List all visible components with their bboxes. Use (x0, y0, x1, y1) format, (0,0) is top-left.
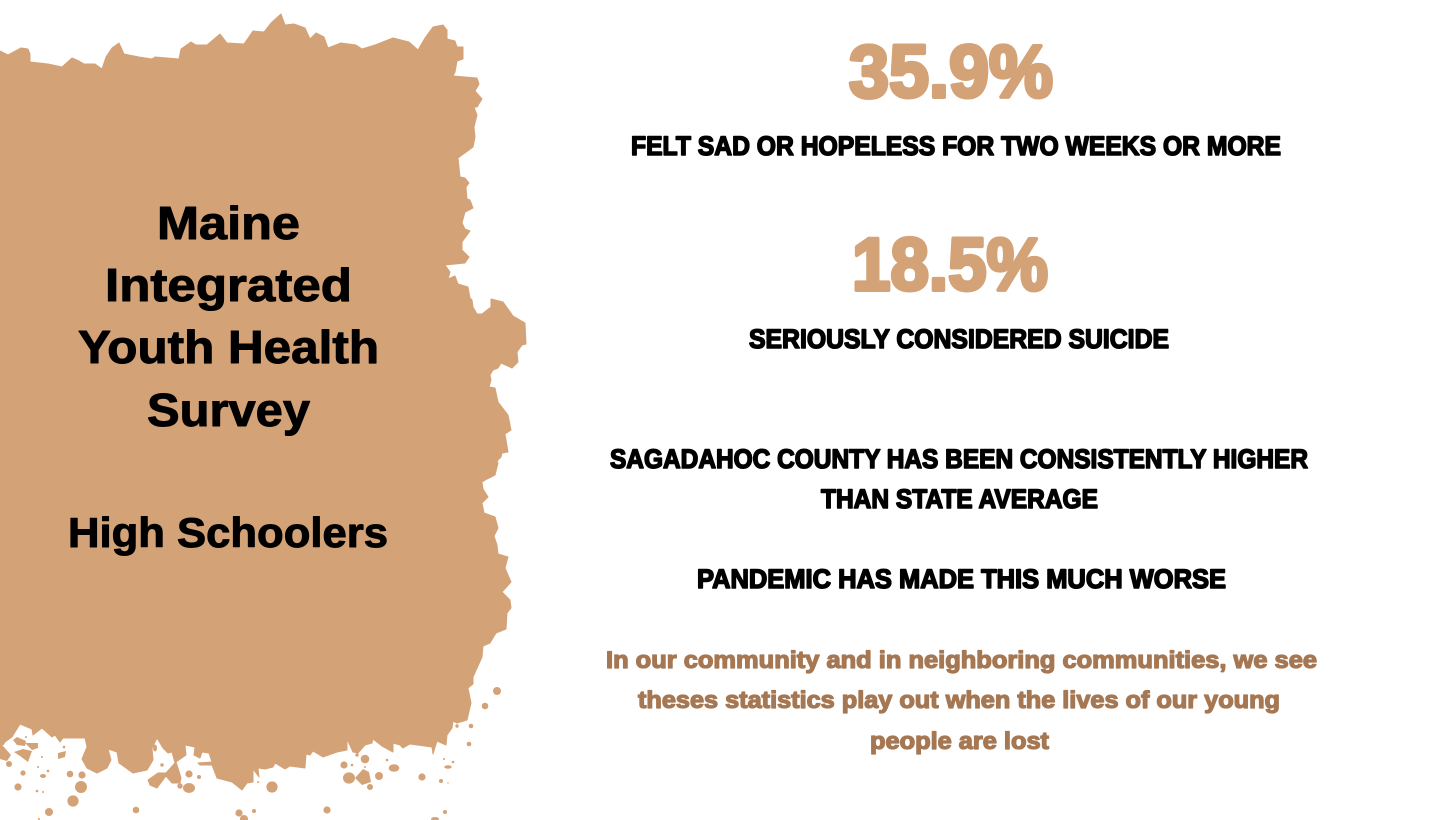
statistic label: felt sad or hopeless: FELT SAD OR HOPELESS FOR TWO WEEKS OR MORE (631, 131, 1281, 161)
panel: torn paint brush background (0, 14, 526, 820)
text block: community note: theses statistics play out when the lives of our young (638, 687, 1280, 714)
text block: community note: In our community and in neighboring communities, we see (606, 647, 1317, 674)
title: Maine Integrated Youth Health Survey: Integrated (105, 259, 352, 311)
title: Maine Integrated Youth Health Survey: Survey (147, 384, 310, 436)
text block: pandemic: PANDEMIC HAS MADE THIS MUCH WORSE (697, 564, 1226, 594)
statistic: 35.9%: 35.9% (849, 30, 1053, 113)
text block: community note: people are lost (870, 728, 1049, 755)
text block: Sagadahoc County: THAN STATE AVERAGE (821, 484, 1098, 514)
title: Maine Integrated Youth Health Survey (78, 197, 379, 436)
statistic label: seriously considered suicide: SERIOUSLY CONSIDERED SUICIDE (749, 324, 1169, 354)
subtitle: High Schoolers: High Schoolers (68, 509, 388, 556)
text block: Sagadahoc County (610, 444, 1308, 514)
text block: Sagadahoc County: SAGADAHOC COUNTY HAS BEEN CONSISTENTLY HIGHER (610, 444, 1308, 474)
title: Maine Integrated Youth Health Survey: Youth Health (78, 321, 379, 373)
statistic: 18.5%: 18.5% (852, 223, 1048, 306)
text block: community note (606, 647, 1317, 755)
title: Maine Integrated Youth Health Survey: Maine (157, 197, 300, 249)
